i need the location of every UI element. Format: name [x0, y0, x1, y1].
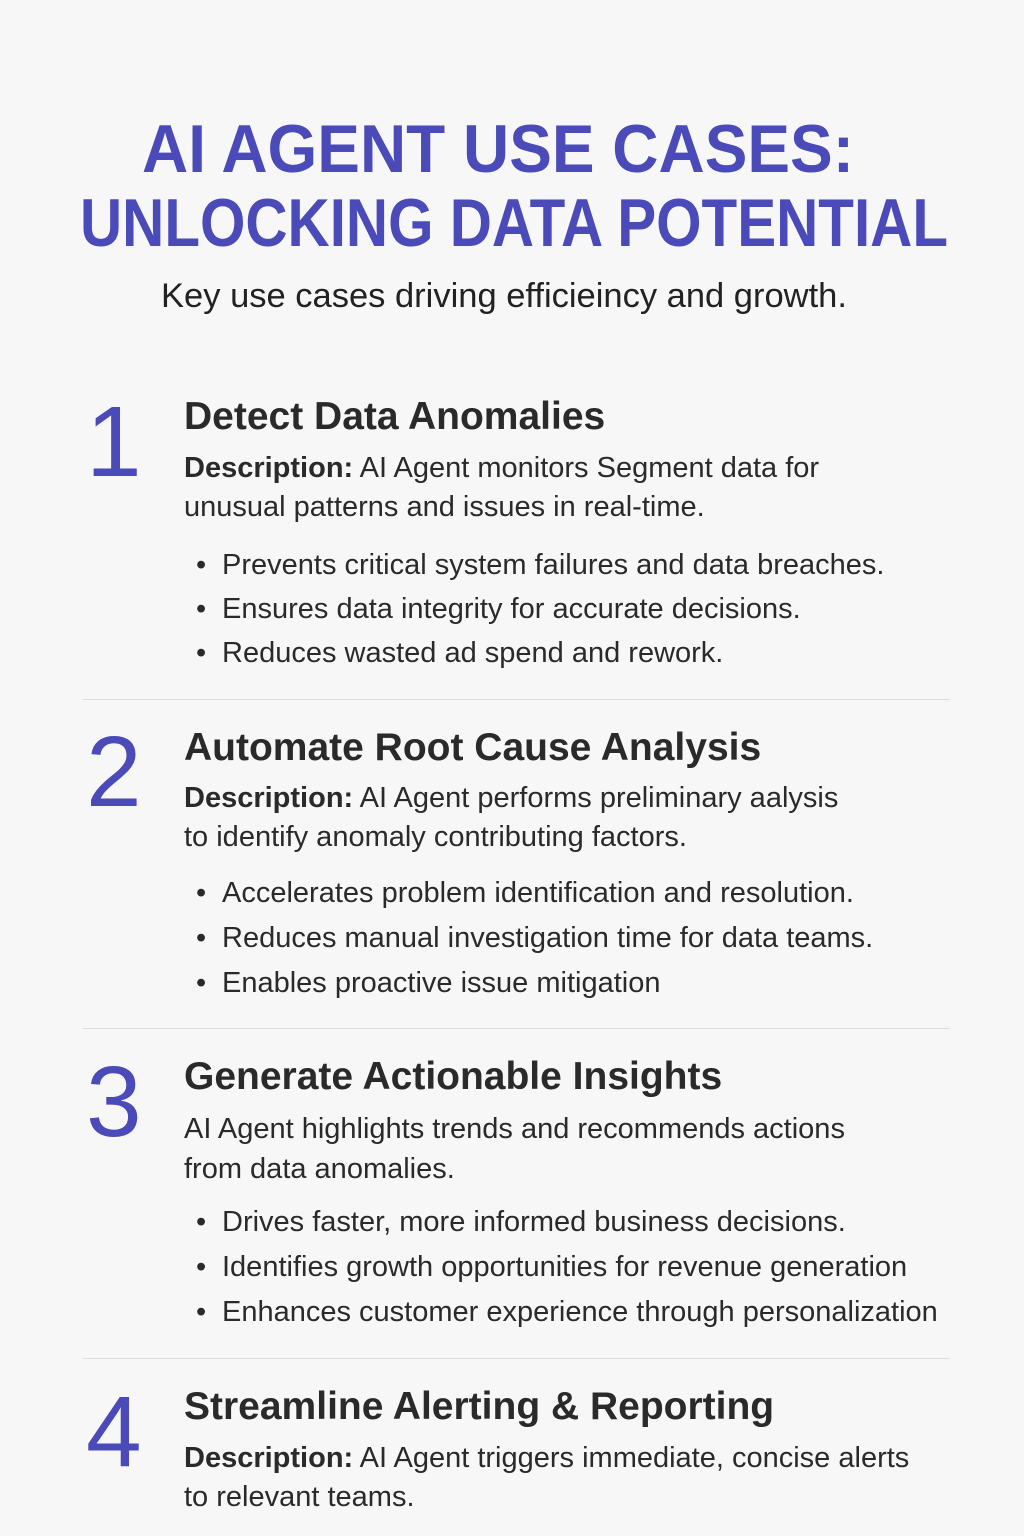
description 3: AI Agent highlights trends and recommends actions [184, 1113, 845, 1145]
bullets 3: • [196, 1206, 206, 1238]
bullets 2: Accelerates problem identification and resolution. [222, 877, 854, 909]
bullets 3: Drives faster, more informed business decisions. [222, 1206, 846, 1238]
number 2: 2 [86, 716, 142, 828]
bullets 1: • [196, 637, 206, 669]
section 4 [86, 1376, 909, 1513]
bullets 3: Identifies growth opportunities for revenue generation [222, 1251, 907, 1283]
bullets 1: • [196, 593, 206, 625]
number 1: 1 [86, 386, 142, 498]
heading 1: Detect Data Anomalies [184, 395, 605, 438]
description 2: Description: AI Agent performs preliminary aalysis [184, 782, 838, 814]
number 4: 4 [86, 1376, 142, 1488]
bullets 1: Reduces wasted ad spend and rework. [222, 637, 723, 669]
description 4 [184, 1442, 909, 1513]
description 3: from data anomalies. [184, 1153, 455, 1185]
bullets 2: • [196, 922, 206, 954]
bullets 1: Prevents critical system failures and data breaches. [222, 549, 884, 581]
bullets 2 [196, 877, 873, 999]
heading 2: Automate Root Cause Analysis [184, 726, 761, 769]
section 2 [86, 716, 873, 999]
bullets 1: Ensures data integrity for accurate decisions. [222, 593, 801, 625]
bullets 3 [196, 1206, 938, 1328]
description 1: unusual patterns and issues in real-time. [184, 491, 705, 523]
bullets 2: Reduces manual investigation time for data teams. [222, 922, 873, 954]
description 4: Description: AI Agent triggers immediate, concise alerts [184, 1442, 909, 1474]
heading 4: Streamline Alerting & Reporting [184, 1385, 774, 1428]
bullets 3: Enhances customer experience through personalization [222, 1296, 938, 1328]
description 1: Description: AI Agent monitors Segment data for [184, 452, 819, 484]
bullets 2: • [196, 877, 206, 909]
section 3 [86, 1046, 938, 1328]
bullets 3: • [196, 1296, 206, 1328]
title: AI AGENT USE CASES: [142, 111, 854, 187]
title [80, 111, 948, 260]
bullets 1: • [196, 549, 206, 581]
description 2 [184, 782, 838, 853]
subtitle: Key use cases driving efficieincy and growth. [161, 277, 847, 315]
bullets 1 [196, 549, 884, 669]
description 2: to identify anomaly contributing factors. [184, 821, 687, 853]
heading 3: Generate Actionable Insights [184, 1055, 722, 1098]
bullets 2: • [196, 967, 206, 999]
number 3: 3 [86, 1046, 142, 1158]
description 3 [184, 1113, 845, 1185]
description 1 [184, 452, 819, 523]
bullets 2: Enables proactive issue mitigation [222, 967, 660, 999]
bullets 3: • [196, 1251, 206, 1283]
description 4: to relevant teams. [184, 1481, 414, 1513]
section 1 [86, 386, 884, 669]
